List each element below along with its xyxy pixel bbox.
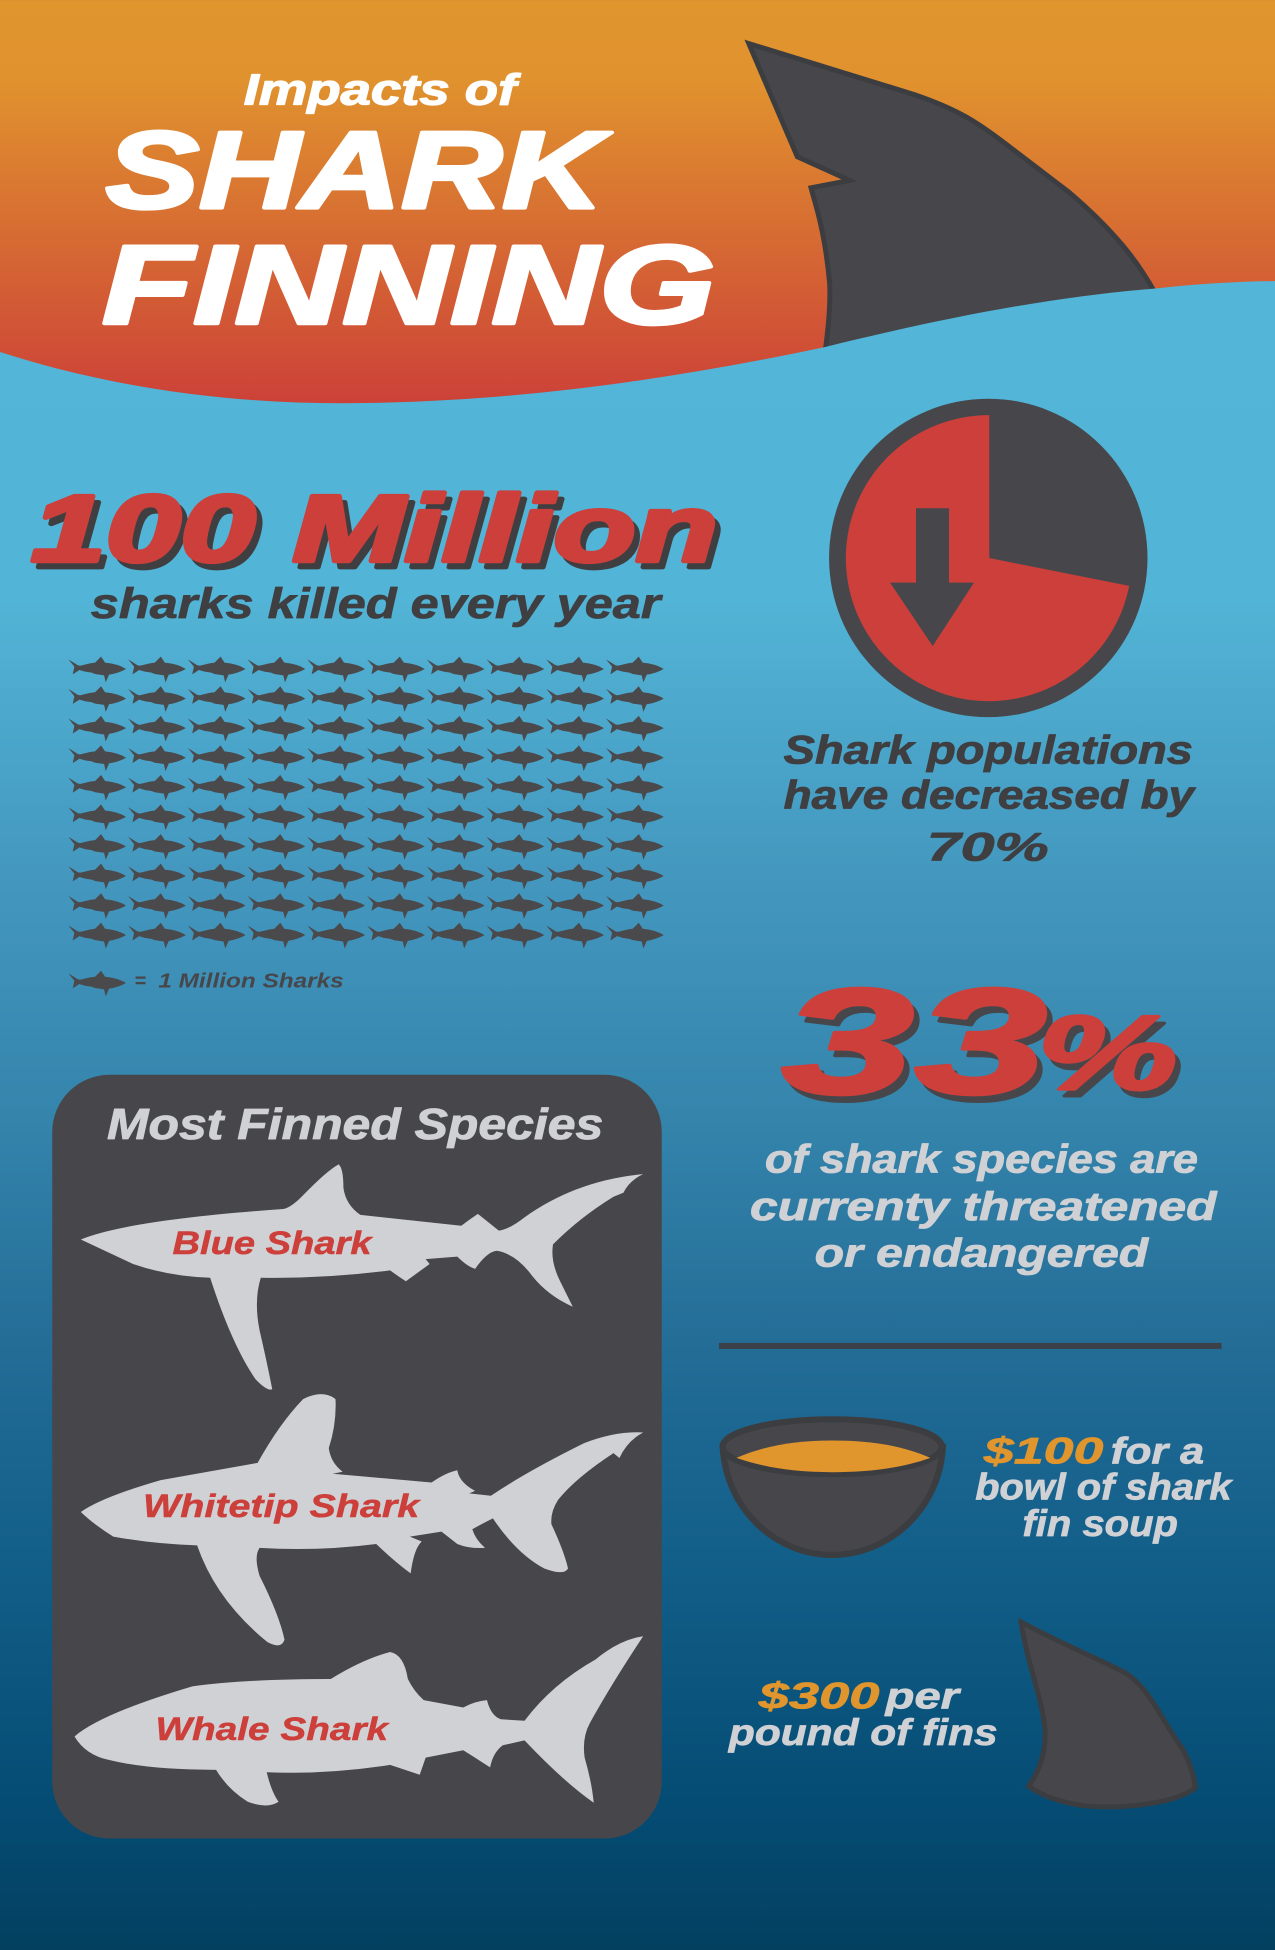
text: $300 per pound of fins: per [884, 1674, 962, 1716]
icon: down arrow [890, 508, 974, 646]
price: $300: $300 [757, 1674, 880, 1716]
text: threatened species: of shark species are [765, 1138, 1198, 1182]
text: $100 for a bowl of shark fin soup: bowl of shark [975, 1465, 1234, 1507]
headline: 33%: 33 [787, 964, 1053, 1132]
headline: 100 Million: 100 Million [37, 482, 723, 588]
title line: SHARK: SHARK [106, 110, 612, 232]
icon: small shark fin [1021, 1622, 1195, 1807]
headline: 33%: % [1042, 1001, 1183, 1119]
text: shark populations decrease: 70% [927, 825, 1049, 869]
text: $100 for a bowl of shark fin soup: fin soup [1022, 1502, 1178, 1544]
pie chart: 70% decrease [829, 399, 1148, 717]
icon: soup bowl [723, 1419, 943, 1555]
panel: most finned species [52, 1075, 662, 1839]
title [102, 67, 715, 347]
headline: 33%: % [1037, 994, 1177, 1112]
text: threatened species: or endangered [815, 1232, 1149, 1276]
legend text: = [134, 970, 146, 992]
text: shark populations decrease: Shark populations [784, 728, 1193, 772]
shark: whale shark [75, 1636, 643, 1805]
text: $300 per pound of fins: pound of fins [728, 1711, 998, 1753]
text: $100 for a bowl of shark fin soup [975, 1429, 1234, 1544]
text: threatened species [750, 1138, 1217, 1276]
panel heading: Most Finned Species [107, 1101, 603, 1149]
soup surface [736, 1440, 930, 1472]
label: Whale Shark: Whale Shark [155, 1711, 391, 1747]
header sky background [0, 0, 1275, 423]
subheading: sharks killed every year: sharks killed every year [91, 580, 664, 627]
label: Blue Shark: Blue Shark [173, 1225, 374, 1261]
headline: 100 Million: 100 Million [31, 476, 718, 582]
legend: 1 million sharks [68, 970, 344, 996]
headline: 33% [781, 957, 1183, 1132]
text: shark populations decrease [784, 728, 1196, 869]
title line: Impacts of: Impacts of [244, 67, 522, 115]
headline: 100 Million [31, 476, 723, 588]
text: $300 per pound of fins [728, 1674, 998, 1753]
headline: 33%: 33 [781, 957, 1047, 1125]
text: shark populations decrease: have decreased by [784, 774, 1196, 818]
pictogram: 100 shark icons [68, 657, 664, 948]
text: threatened species: currenty threatened [750, 1185, 1217, 1229]
icon: large shark fin [749, 44, 1157, 355]
price: $100: $100 [982, 1429, 1104, 1471]
label: Whitetip Shark: Whitetip Shark [143, 1488, 422, 1524]
legend text: 1 Million Sharks [158, 970, 344, 992]
shark: blue shark [81, 1164, 643, 1390]
shark: whitetip shark [81, 1394, 643, 1645]
title line: FINNING: FINNING [102, 222, 715, 347]
icon: legend shark [68, 971, 126, 996]
text: $100 for a bowl of shark fin soup: for a [1111, 1429, 1204, 1471]
